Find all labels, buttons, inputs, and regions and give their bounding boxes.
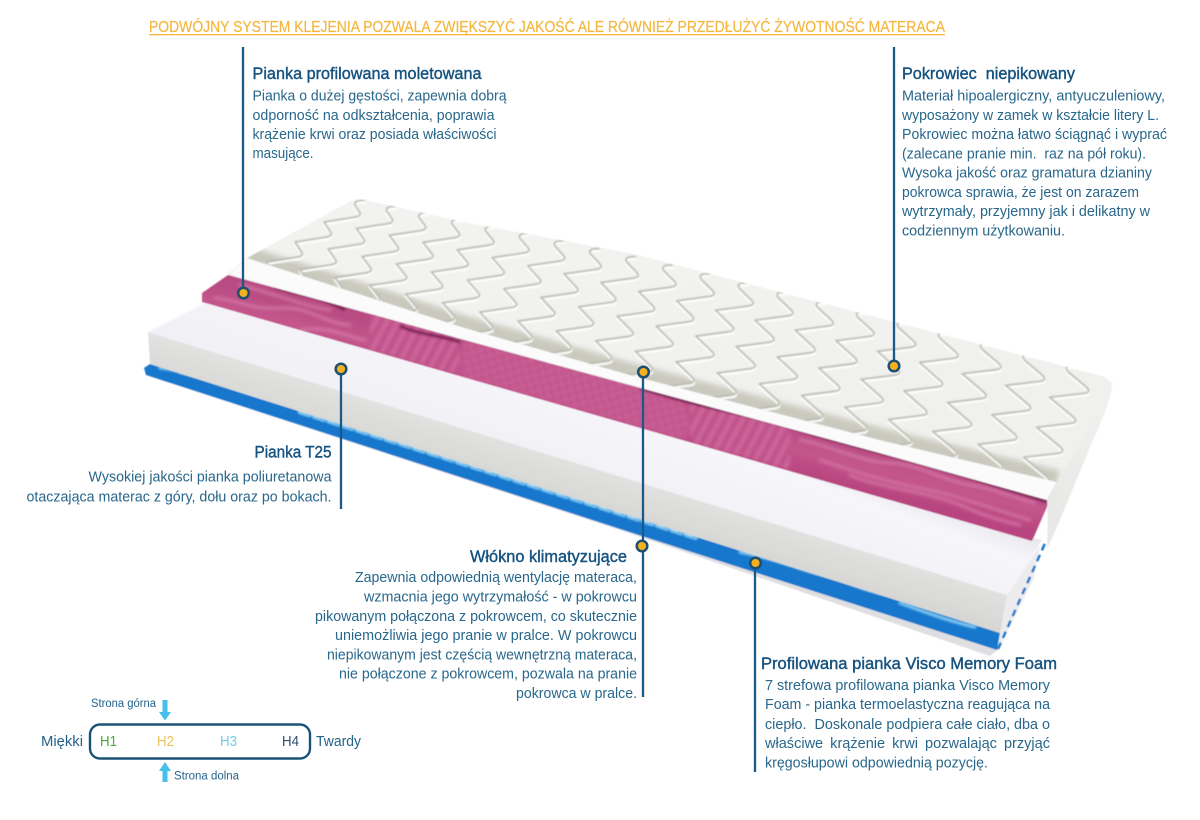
cover right side <box>1047 380 1112 549</box>
callout: Włókno klimatyzujące: pokrowca w pralce. <box>516 686 637 702</box>
white T25 foam side <box>148 332 1007 633</box>
callout: Pokrowiec niepikowany: pokrowca sprawia, że jest on zarazem <box>902 185 1139 201</box>
callout: Włókno klimatyzujące: uniemożliwia jego pranie w pralce. W pokrowcu <box>335 628 637 644</box>
firmness legend: H3 <box>220 734 237 750</box>
callout: Pokrowiec niepikowany: codziennym użytkowaniu. <box>902 224 1065 240</box>
callout: Pianka profilowana moletowana: Pianka o dużej gęstości, zapewnia dobrą <box>252 88 507 104</box>
title: PODWÓJNY SYSTEM KLEJENIA POZWALA ZWIĘKSZYĆ JAKOŚĆ ALE RÓWNIEŻ PRZEDŁUŻYĆ ŻYWOTNOŚĆ MATERACA <box>149 17 945 36</box>
callout: Profilowana pianka Visco Memory Foam: kręgosłupowi odpowiednią pozycję. <box>765 756 988 772</box>
callout: Pianka T25: otaczająca materac z góry, dołu oraz po bokach. <box>26 490 332 506</box>
callout: Włókno klimatyzujące: wzmacnia jego wytrzymałość - w pokrowcu <box>363 590 637 606</box>
callout: Pianka profilowana moletowana: Pianka profilowana moletowana <box>252 65 482 83</box>
firmness legend: Twardy <box>316 734 362 750</box>
callout: Pianka T25: Wysokiej jakości pianka poliuretanowa <box>88 470 332 486</box>
callout: Pokrowiec niepikowany: wyposażony w zamek w kształcie litery L. <box>901 108 1159 124</box>
firmness legend: Strona dolna <box>174 770 240 782</box>
callout: Włókno klimatyzujące <box>315 367 649 702</box>
callout: Włókno klimatyzujące: Zapewnia odpowiednią wentylację materaca, <box>355 570 637 586</box>
callout: Profilowana pianka Visco Memory Foam <box>750 558 1057 772</box>
cover white edge strip <box>228 258 1057 500</box>
callout: Profilowana pianka Visco Memory Foam: 7 strefowa profilowana pianka Visco Memory <box>765 678 1051 694</box>
callout: Profilowana pianka Visco Memory Foam: ciepło. Doskonale podpiera całe ciało, dba o <box>765 717 1050 733</box>
callout: Pianka T25: Pianka T25 <box>254 444 332 462</box>
callout: Pianka profilowana moletowana: odporność na odkształcenia, poprawia <box>252 108 495 124</box>
callout: Pokrowiec niepikowany: Pokrowiec niepikowany <box>902 65 1076 83</box>
callout: Włókno klimatyzujące: nie połączone z pokrowcem, pozwala na pranie <box>339 666 637 682</box>
pink profiled foam layer <box>202 275 1050 541</box>
mattress illustration <box>144 200 1200 656</box>
callout: Włókno klimatyzujące: Włókno klimatyzujące <box>470 548 627 566</box>
foam right side with blue dashes <box>998 541 1046 650</box>
white T25 foam top <box>148 303 1042 595</box>
callout: Pianka profilowana moletowana: krążenie krwi oraz posiada właściwości <box>252 127 496 143</box>
callout: Pokrowiec niepikowany: Wysoka jakość oraz gramatura dzianiny <box>902 166 1153 182</box>
firmness legend: Miękki <box>41 734 83 750</box>
callout: Profilowana pianka Visco Memory Foam: właściwe krążenie krwi pozwalając przyjąć <box>764 736 1050 752</box>
callout: Pokrowiec niepikowany <box>889 47 1167 371</box>
callout: Pianka profilowana moletowana <box>238 47 507 298</box>
icon: arrow up <box>159 762 171 782</box>
base layer under blue foam <box>146 368 1000 656</box>
firmness legend: H2 <box>157 734 174 750</box>
callout: Włókno klimatyzujące: pikowanym połączona z pokrowcem, co skutecznie <box>315 609 637 625</box>
legend scale box <box>90 724 310 758</box>
callout: Pianka profilowana moletowana: masujące. <box>252 146 314 162</box>
callout: Pokrowiec niepikowany: (zalecane pranie min. raz na pół roku). <box>902 146 1146 162</box>
firmness legend: Strona górna <box>91 698 157 710</box>
firmness legend: H4 <box>282 734 299 750</box>
callout: Pokrowiec niepikowany: wytrzymały, przyjemny jak i delikatny w <box>901 204 1151 220</box>
blue visco foam layer <box>144 364 1000 650</box>
quilted cover top <box>248 199 1110 482</box>
callout: Profilowana pianka Visco Memory Foam: Foam - pianka termoelastyczna reagująca na <box>765 697 1051 713</box>
callout: Pokrowiec niepikowany: Materiał hipoalergiczny, antyuczuleniowy, <box>902 88 1165 104</box>
callout: Pokrowiec niepikowany: Pokrowiec można łatwo ściągnąć i wyprać <box>902 127 1167 143</box>
ripple along the top edge <box>300 412 700 539</box>
firmness legend: H1 <box>100 734 117 750</box>
callout: Włókno klimatyzujące: niepikowanym jest częścią wewnętrzną materaca, <box>327 648 637 664</box>
callout: Pianka T25 <box>26 364 346 509</box>
callout: Profilowana pianka Visco Memory Foam: Profilowana pianka Visco Memory Foam <box>761 655 1057 673</box>
icon: arrow down <box>159 700 171 720</box>
firmness legend <box>41 698 362 782</box>
quilting zigzag pattern <box>264 199 1090 480</box>
